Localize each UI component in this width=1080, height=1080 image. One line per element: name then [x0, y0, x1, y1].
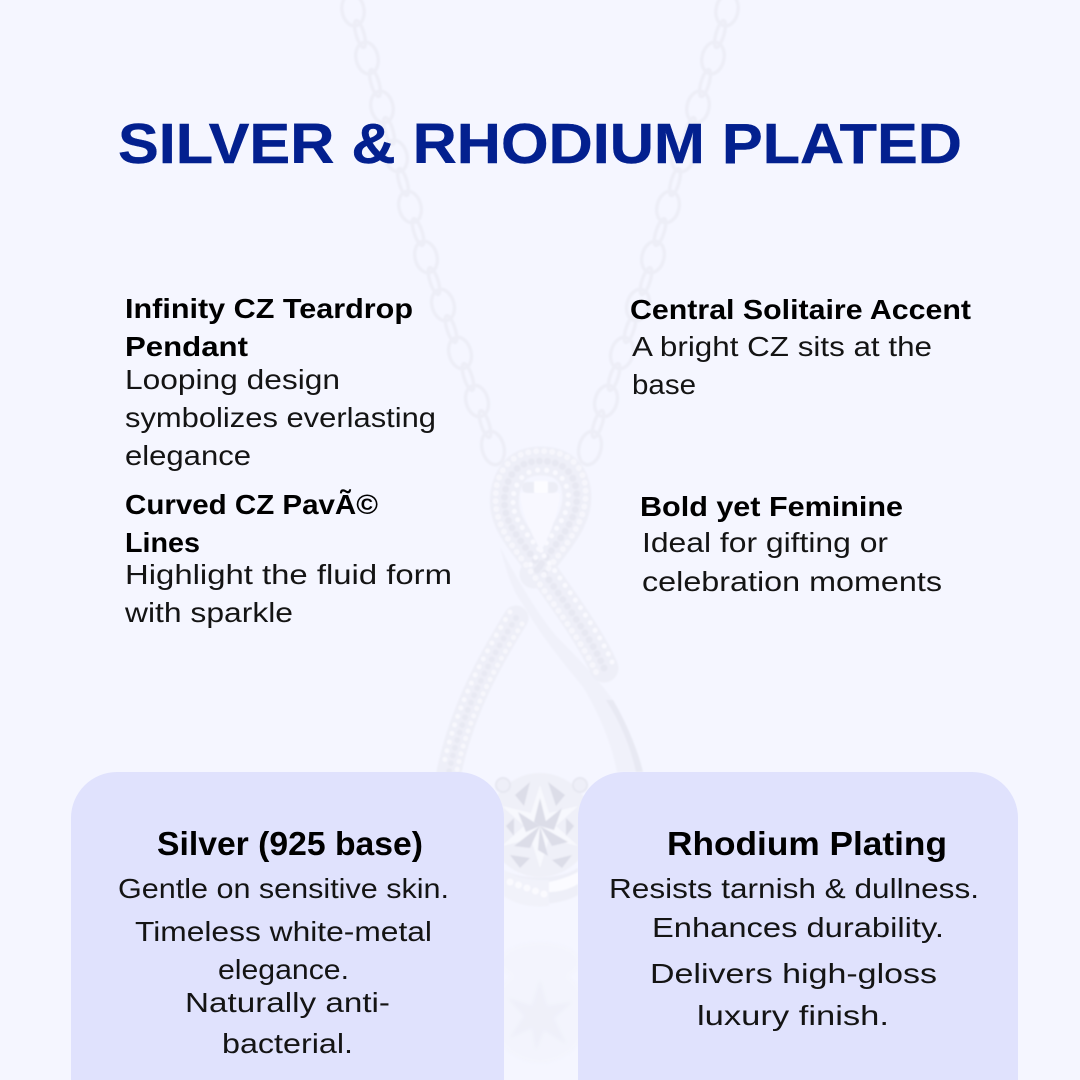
- pendant inner opening: [520, 493, 560, 551]
- faint diamond reflection: [492, 942, 588, 1063]
- feature: Curved CZ Pave Lines: Highlight the fluid form: [125, 559, 452, 590]
- pendant pave ribbon loop: [496, 451, 612, 672]
- panel text: Silver benefits: Timeless white-metal: [135, 916, 432, 947]
- pendant base band: [504, 868, 578, 907]
- feature: Bold yet Feminine: Bold yet Feminine: [640, 491, 903, 522]
- feature: Bold yet Feminine: celebration moments: [642, 566, 942, 597]
- feature: Curved CZ Pave Lines: [124, 489, 452, 628]
- feature: Infinity CZ Teardrop Pendant: Looping design: [125, 364, 340, 395]
- pendant smooth silver band: [500, 547, 643, 772]
- feature: Curved CZ Pave Lines: with sparkle: [124, 597, 293, 628]
- feature: Infinity CZ Teardrop Pendant: [125, 293, 436, 471]
- panel text: Silver benefits: [118, 873, 449, 1059]
- panel text: Rhodium benefits: luxury finish.: [697, 1000, 889, 1031]
- panel text: Rhodium benefits: [609, 873, 979, 1031]
- panel text: Silver benefits: bacterial.: [222, 1028, 353, 1059]
- feature: Central Solitaire Accent: base: [632, 369, 696, 400]
- panel heading: Rhodium: Rhodium Plating: [667, 825, 947, 862]
- right chain: [575, 0, 741, 467]
- panel: Silver (925 base): [71, 772, 504, 1080]
- feature: Central Solitaire Accent: A bright CZ sits at the: [632, 331, 932, 362]
- panel: Rhodium Plating: [578, 772, 1018, 1080]
- panel text: Rhodium benefits: Enhances durability.: [652, 912, 944, 943]
- feature: Infinity CZ Teardrop Pendant: Pendant: [125, 331, 248, 362]
- pendant lower left pave band: [443, 612, 522, 775]
- faded necklace photo: [339, 0, 741, 1063]
- center solitaire diamond: [488, 773, 592, 877]
- panel text: Silver benefits: Naturally anti-: [185, 987, 390, 1018]
- panel text: Silver benefits: Gentle on sensitive skin.: [118, 873, 449, 904]
- pendant bail: [522, 481, 558, 493]
- panel text: Rhodium benefits: Delivers high-gloss: [650, 958, 937, 989]
- left chain: [339, 0, 508, 467]
- feature: Curved CZ Pave Lines: Lines: [125, 527, 200, 558]
- feature: Infinity CZ Teardrop Pendant: elegance: [125, 440, 251, 471]
- panel text: Rhodium benefits: Resists tarnish & dullness.: [609, 873, 979, 904]
- feature: Infinity CZ Teardrop Pendant: symbolizes everlasting: [125, 402, 436, 433]
- feature: Central Solitaire Accent: Central Solitaire Accent: [630, 294, 971, 325]
- feature: Infinity CZ Teardrop Pendant: Infinity CZ Teardrop: [125, 293, 413, 324]
- feature: Curved CZ Pave Lines: Curved CZ PavÃ©: [125, 489, 378, 520]
- feature: Central Solitaire Accent: [630, 294, 971, 400]
- panel text: Silver benefits: elegance.: [218, 954, 349, 985]
- feature: Bold yet Feminine: [640, 491, 942, 597]
- feature: Bold yet Feminine: Ideal for gifting or: [642, 527, 888, 558]
- panel heading: Silver: Silver (925 base): [157, 825, 423, 862]
- title: SILVER & RHODIUM PLATED: [118, 112, 962, 176]
